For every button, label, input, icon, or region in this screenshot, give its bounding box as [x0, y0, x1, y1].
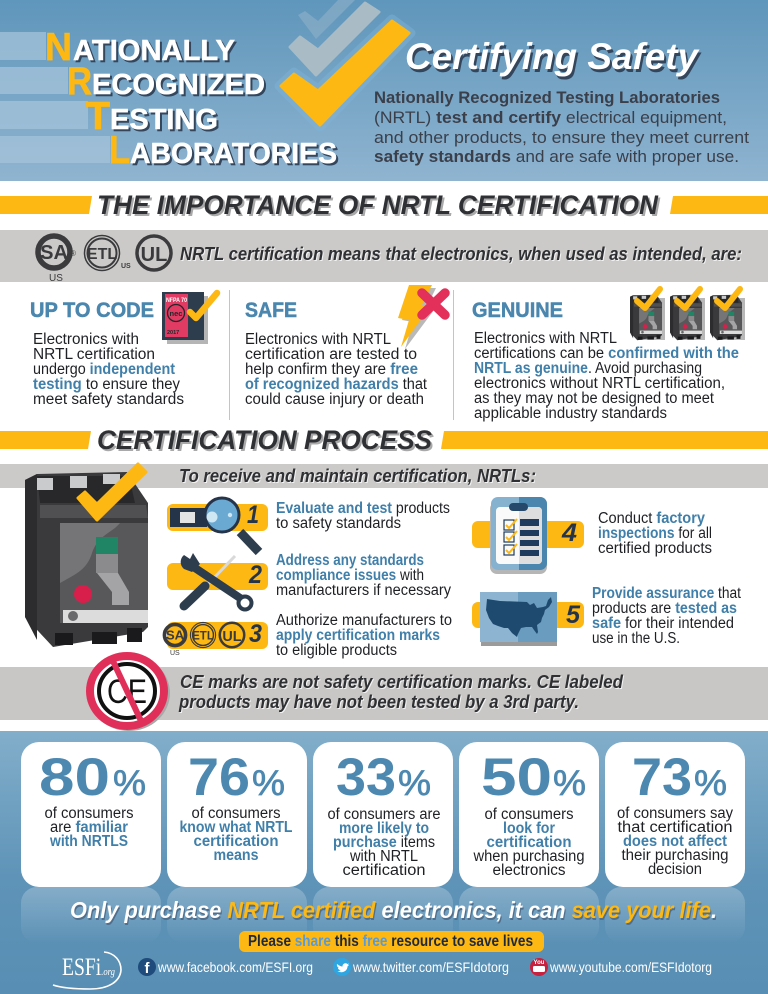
panel: up to code	[30, 292, 217, 408]
panel: certification marks band	[0, 230, 768, 284]
stat card: 80%: of consumers	[44, 805, 134, 822]
icon: three certified breakers	[630, 289, 745, 340]
stat card: 80%: with NRTLS	[49, 833, 128, 850]
card reflections	[21, 887, 745, 943]
body text: help confirm they are free	[245, 361, 418, 378]
body text: certification are tested to	[245, 346, 417, 363]
stat card: 73%: decision	[648, 861, 702, 878]
stat card: 80%: %	[113, 764, 146, 803]
step 2	[167, 552, 451, 610]
stat card: 80%	[21, 742, 161, 887]
stat card: 50%: certification	[486, 834, 572, 851]
step text: to eligible products	[276, 642, 397, 659]
band text: NRTL certification means that electronics, when used as intended, are:	[180, 244, 742, 264]
stat card: 73%: 73	[632, 748, 692, 807]
step text: Conduct factory	[598, 510, 705, 527]
slogan: Only purchase NRTL certified electronics, it can save your life.	[70, 897, 717, 923]
warning text	[178, 672, 624, 712]
logo: ESFi.org	[53, 952, 121, 989]
panel: safe	[245, 285, 445, 408]
icon: NEC code book: NFPA 70	[166, 297, 187, 304]
intro paragraph: Nationally Recognized Testing Laboratories	[374, 89, 720, 107]
stat card: 73%: of consumers say	[617, 805, 733, 822]
stat card: 73%: %	[694, 764, 727, 803]
step text: apply certification marks	[276, 627, 440, 644]
title: Nationally Recognized Testing Laboratories: ABORATORIES	[130, 138, 337, 170]
icon: large circuit breaker with check	[25, 464, 148, 647]
title: Nationally Recognized Testing Laboratories: ATIONALLY	[73, 35, 235, 67]
step text: manufacturers if necessary	[276, 582, 451, 599]
icon: prohibited CE mark: CE	[107, 673, 147, 711]
social: twitter: www.twitter.com/ESFIdotorg	[352, 959, 509, 975]
social: facebook	[138, 958, 313, 977]
body text: as they may not be designed to meet	[474, 390, 715, 407]
step 1	[167, 498, 450, 552]
step 4: 4	[561, 519, 577, 547]
icon: NEC code book: 2017	[167, 330, 179, 336]
icon: wrench and screwdriver	[181, 553, 252, 610]
step 1: 1	[247, 501, 259, 529]
social: facebook: www.facebook.com/ESFI.org	[157, 959, 313, 975]
icon: layered checkmarks	[279, 0, 411, 127]
stat card: 50%: look for	[503, 820, 555, 837]
icon: map of the United States	[480, 592, 557, 646]
step text: inspections for all	[598, 525, 712, 542]
stat card: 33%: purchase items	[333, 834, 435, 851]
stat card: 76%	[167, 742, 307, 887]
subtitle: Certifying Safety: Certifying Safety	[405, 36, 700, 77]
title: Nationally Recognized Testing Laboratories: R	[67, 60, 92, 103]
step text	[598, 510, 712, 557]
title: Nationally Recognized Testing Laboratories	[45, 26, 337, 172]
stat card: 73%: does not affect	[623, 833, 727, 850]
step text	[276, 500, 450, 532]
share button: Please share this free resource to save lives	[248, 933, 533, 950]
stat card: 33%: %	[398, 764, 431, 803]
heading: GENUINE	[472, 299, 563, 322]
body text: Electronics with NRTL	[245, 331, 391, 348]
body text: certifications can be confirmed with the	[474, 345, 739, 362]
stat card: 76%: 76	[188, 748, 250, 807]
step text: safe for their intended	[592, 615, 734, 632]
intro paragraph	[374, 89, 749, 166]
heading: UP TO CODE	[30, 299, 154, 322]
stat card: 33%: certification	[342, 862, 426, 879]
step 2: 2	[248, 561, 262, 589]
stat card: 73%: that certification	[618, 819, 732, 836]
step text	[276, 552, 451, 599]
body text: Electronics with	[33, 331, 139, 348]
stat card: 50%: of consumers	[484, 806, 574, 823]
icon: CSA mark: US	[49, 273, 63, 284]
icon: lightning bolt with red X	[398, 285, 445, 349]
step 5	[472, 585, 742, 647]
step text: use in the U.S.	[592, 630, 680, 647]
social: youtube: You	[534, 960, 545, 966]
heading: Certification Process	[0, 425, 768, 455]
icon: certification marks: US	[170, 650, 180, 657]
panel: header	[0, 0, 768, 181]
step 4	[472, 497, 712, 574]
title stripes	[0, 32, 110, 163]
step text: Evaluate and test products	[276, 500, 450, 517]
stat card: 50%	[459, 742, 599, 887]
panel: genuine	[472, 289, 745, 422]
stat card: 73%: their purchasing	[622, 847, 728, 864]
heading: SAFE	[245, 299, 297, 322]
social: youtube: www.youtube.com/ESFIdotorg	[549, 959, 712, 975]
warning text: products may have not been tested by a 3rd party.	[178, 692, 579, 712]
intro paragraph: (NRTL) test and certify electrical equipment,	[374, 109, 727, 127]
title: Nationally Recognized Testing Laboratories: ESTING	[110, 104, 218, 136]
step text: products are tested as	[592, 600, 737, 617]
step text	[592, 585, 742, 647]
panel: CE warning band	[0, 655, 768, 731]
icon: ETL mark	[84, 236, 131, 270]
body text: applicable industry standards	[474, 405, 667, 422]
body text: NRTL certification	[33, 346, 155, 363]
icon: NEC code book	[162, 292, 217, 344]
icon: UL mark	[137, 236, 171, 270]
title: Nationally Recognized Testing Laboratories: T	[86, 95, 110, 138]
stat card: 76%: means	[214, 847, 258, 864]
step 3: 3	[249, 620, 262, 648]
stat card: 33%: more likely to	[339, 820, 429, 837]
intro paragraph: safety standards and are safe with proper use.	[374, 148, 739, 166]
heading: Certification Process: CERTIFICATION PROCESS	[97, 425, 432, 455]
panel: statistics footer	[0, 731, 768, 994]
body text: NRTL as genuine. Avoid purchasing	[474, 360, 702, 377]
stat card: 73%	[605, 742, 745, 887]
icon: certification marks	[164, 622, 244, 657]
step text: Provide assurance that	[592, 585, 742, 602]
body text	[474, 330, 739, 422]
warning text: CE marks are not safety certification marks. CE labeled	[180, 672, 624, 692]
stat card: 80%: 80	[39, 748, 110, 807]
step text: certified products	[598, 540, 712, 557]
step text: compliance issues with	[276, 567, 424, 584]
step 5: 5	[566, 601, 581, 629]
stat card: 50%: %	[553, 764, 586, 803]
body text: could cause injury or death	[245, 391, 424, 408]
band: to receive and maintain certification	[0, 464, 768, 488]
stat card: 33%: with NRTL	[349, 848, 418, 865]
stat card: 50%: when purchasing	[473, 848, 584, 865]
body text: testing to ensure they	[33, 376, 180, 393]
body text	[245, 331, 428, 408]
title: Nationally Recognized Testing Laboratories: L	[109, 129, 130, 172]
title: Nationally Recognized Testing Laboratories: N	[45, 26, 72, 69]
icon: CSA mark	[38, 236, 76, 284]
step text: to safety standards	[276, 515, 401, 532]
social: facebook: f	[144, 960, 150, 977]
step text: Address any standards	[276, 552, 424, 569]
icon: magnifying glass over plug	[170, 498, 259, 552]
stat card: 50%: electronics	[492, 862, 566, 879]
stat card: 76%: know what NRTL	[180, 819, 292, 836]
icon: ETL mark: US	[121, 263, 131, 270]
stat card: 76%: of consumers	[192, 805, 281, 822]
body text	[33, 331, 184, 408]
stat card: 33%: of consumers are	[328, 806, 440, 823]
stat card: 33%	[313, 742, 453, 887]
body text: meet safety standards	[33, 391, 184, 408]
intro paragraph: and other products, to ensure they meet current	[374, 129, 749, 147]
icon: clipboard checklist	[490, 497, 547, 574]
body text: of recognized hazards that	[245, 376, 428, 393]
stat card: 50%: 50	[481, 748, 552, 807]
stat card: 76%: %	[252, 764, 285, 803]
body text: undergo independent	[33, 361, 175, 378]
band: to receive and maintain certification: To receive and maintain certification, NRTLs:	[179, 466, 536, 486]
icon: prohibited CE mark	[88, 655, 170, 731]
title: Nationally Recognized Testing Laboratories: ECOGNIZED	[92, 69, 265, 101]
step text	[276, 612, 452, 659]
step 3	[164, 612, 452, 659]
logo: ESFi.org: ESFi.org	[62, 954, 115, 981]
heading: The Importance of NRTL Certification: THE IMPORTANCE OF NRTL CERTIFICATION	[97, 190, 658, 220]
stat card: 76%: certification	[194, 833, 278, 850]
step text: Authorize manufacturers to	[276, 612, 452, 629]
body text: Electronics with NRTL	[474, 330, 617, 347]
icon: CSA mark: ®	[70, 249, 76, 258]
stat card: 33%: 33	[336, 748, 396, 807]
stat card: 80%: are familiar	[50, 819, 128, 836]
body text: electronics without NRTL certification,	[474, 375, 725, 392]
icon: NEC code book: nec	[170, 309, 182, 318]
